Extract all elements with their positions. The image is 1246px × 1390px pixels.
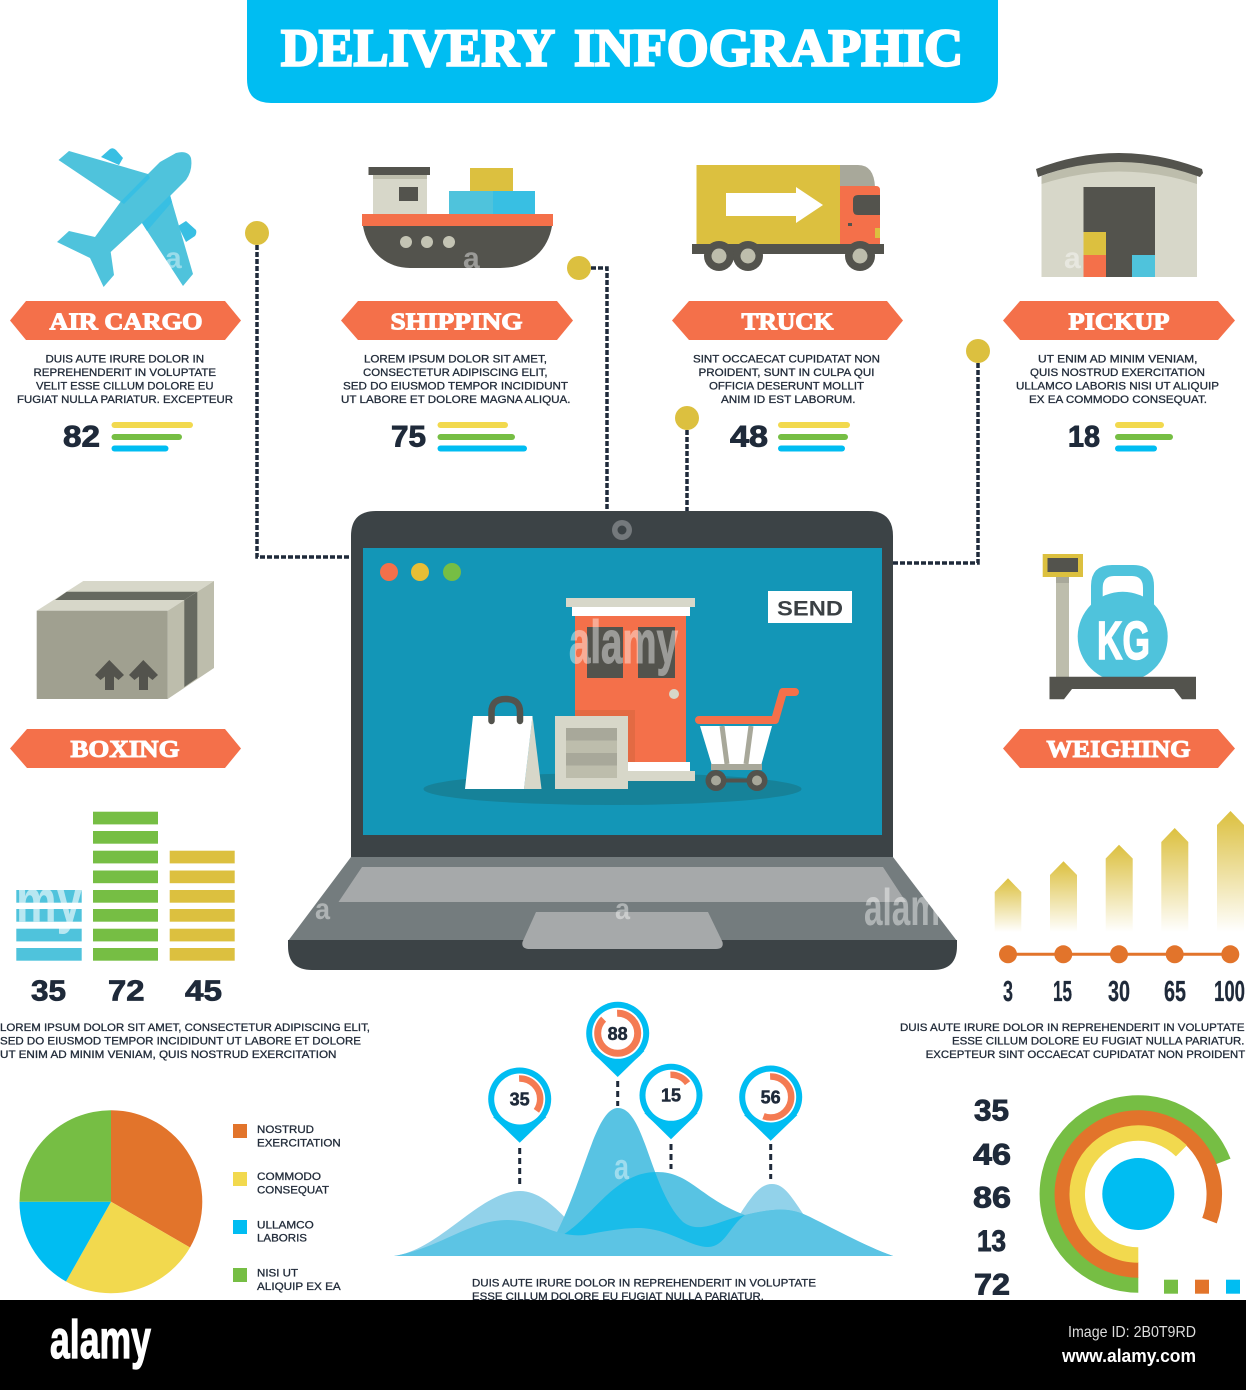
icon: warehouse: a: [1064, 242, 1081, 275]
label: shipping: SHIPPING: [390, 308, 522, 336]
icon: airplane: a: [165, 242, 182, 275]
watermark: center: alamy: [569, 609, 678, 676]
label: truck: [672, 301, 903, 340]
label: truck: TRUCK: [742, 308, 834, 336]
label: weighing: WEIGHING: [1046, 736, 1190, 763]
timeline values: 65: [1164, 976, 1186, 1008]
pie legend: ULLAMCO: [257, 1219, 314, 1231]
text: pickup description: QUIS NOSTRUD EXERCITATION: [1030, 367, 1205, 379]
timeline values: 3: [1003, 976, 1013, 1008]
send button: SEND: [777, 596, 843, 620]
shopping cart: [699, 692, 795, 791]
keyboard: [338, 867, 906, 902]
stat: shipping 75: 75: [391, 420, 426, 454]
text: pickup description: [1016, 354, 1219, 406]
text: air cargo description: FUGIAT NULLA PARIATUR. EXCEPTEUR: [17, 394, 233, 406]
icon: warehouse: [1036, 153, 1203, 277]
text: pickup description: EX EA COMMODO CONSEQUAT.: [1029, 394, 1207, 406]
bar values: 72: [108, 976, 144, 1008]
bar values: 45: [185, 976, 222, 1008]
map pin: 35: 35: [510, 1090, 530, 1110]
stat: pickup 18: [1068, 420, 1173, 454]
text: left paragraph: [0, 1022, 370, 1061]
bar values: [31, 976, 222, 1008]
text: right paragraph: DUIS AUTE IRURE DOLOR IN REPREHENDERIT IN VOLUPTATE: [900, 1022, 1244, 1034]
connector: air cargo to laptop: [245, 221, 352, 557]
pie chart: [19, 1110, 202, 1293]
text: chart caption: DUIS AUTE IRURE DOLOR IN REPREHENDERIT IN VOLUPTATE: [472, 1278, 816, 1290]
stat: truck 48: [730, 420, 850, 454]
footer image id: Image ID: 2B0T9RD: [1068, 1324, 1196, 1341]
label: air cargo: AIR CARGO: [50, 308, 202, 336]
text: right paragraph: EXCEPTEUR SINT OCCAECAT CUPIDATAT NON PROIDENT: [926, 1049, 1245, 1061]
package crate: [555, 716, 628, 789]
timeline values: 30: [1108, 976, 1130, 1008]
text: truck description: ANIM ID EST LABORUM.: [721, 394, 856, 406]
connector: truck to laptop: [675, 406, 699, 511]
webcam: [612, 520, 632, 540]
stat: pickup 18: 18: [1068, 420, 1100, 454]
connector: pickup to laptop: [893, 339, 990, 563]
title banner: [247, 0, 998, 103]
text: truck description: SINT OCCAECAT CUPIDATAT NON: [693, 354, 880, 366]
title banner: DELIVERY: [281, 20, 555, 78]
bar chart: stacked blocks: [16, 812, 235, 1008]
text: shipping description: CONSECTETUR ADIPISCING ELIT,: [363, 367, 548, 379]
pie legend: LABORIS: [257, 1233, 307, 1245]
pie legend: [233, 1124, 341, 1293]
text: pickup description: UT ENIM AD MINIM VENIAM,: [1038, 354, 1198, 366]
map pin: 15: [640, 1064, 702, 1139]
watermark: base: a: [315, 893, 330, 926]
area chart: a: [614, 1146, 630, 1187]
radial value list: 46: [973, 1138, 1011, 1171]
text: shipping description: UT LABORE ET DOLORE MAGNA ALIQUA.: [341, 394, 570, 406]
label: pickup: PICKUP: [1068, 308, 1170, 336]
door: [566, 598, 695, 781]
timeline: [999, 945, 1239, 963]
icon: cargo ship: [362, 167, 553, 275]
radial chart: [1047, 1103, 1223, 1285]
radial value list: 13: [977, 1225, 1006, 1258]
radial legend squares: [1164, 1280, 1240, 1294]
text: shipping description: LOREM IPSUM DOLOR SIT AMET,: [364, 354, 547, 366]
text: chart caption: ESSE CILLUM DOLORE EU FUGIAT NULLA PARIATUR.: [472, 1291, 764, 1303]
label: pickup: [1003, 301, 1235, 340]
map pin: 88: [586, 1002, 649, 1077]
map pin: 56: [739, 1066, 802, 1141]
pie legend: COMMODO: [257, 1171, 321, 1183]
text: left paragraph: LOREM IPSUM DOLOR SIT AMET, CONSECTETUR ADIPISCING ELIT,: [0, 1022, 370, 1034]
radial value list: [973, 1095, 1011, 1301]
map pin: 35: [488, 1068, 551, 1143]
icon: airplane: [57, 148, 196, 287]
text: air cargo description: REPREHENDERIT IN VOLUPTATE: [34, 367, 216, 379]
laptop: [288, 511, 957, 970]
laptop lid: [351, 511, 893, 858]
text: chart caption: [472, 1278, 816, 1303]
text: left paragraph: SED DO EIUSMOD TEMPOR INCIDIDUNT UT LABORE ET DOLORE: [0, 1035, 361, 1047]
area chart: [394, 1108, 893, 1256]
watermark on bar: my: [16, 868, 82, 935]
pie legend: CONSEQUAT: [257, 1184, 329, 1196]
map pin: 15: 15: [661, 1086, 681, 1106]
icon: kettlebell scale: KG: [1097, 611, 1150, 671]
bar: 72: [93, 812, 158, 961]
bar: 35: [16, 890, 82, 961]
touchpad: [522, 912, 723, 949]
label: air cargo: [10, 301, 241, 340]
laptop front edge: [288, 940, 957, 970]
connector: shipping to laptop: [567, 256, 607, 511]
bar values: 35: [31, 976, 66, 1008]
watermark: base: alam: [864, 879, 940, 937]
stat: shipping 75: [391, 420, 527, 454]
label: boxing: [10, 729, 241, 768]
text: shipping description: SED DO EIUSMOD TEMPOR INCIDIDUNT: [343, 381, 568, 393]
text: air cargo description: DUIS AUTE IRURE DOLOR IN: [46, 354, 204, 366]
timeline values: 15: [1053, 976, 1072, 1008]
window dots: [380, 563, 461, 581]
text: right paragraph: ESSE CILLUM DOLORE EU FUGIAT NULLA PARIATUR.: [952, 1035, 1244, 1047]
stat: truck 48: 48: [730, 420, 768, 454]
text: right paragraph: [900, 1022, 1245, 1061]
text: shipping description: [341, 354, 570, 406]
pie legend: NISI UT: [257, 1268, 298, 1280]
text: air cargo description: VELIT ESSE CILLUM DOLORE EU: [36, 381, 214, 393]
text: air cargo description: [17, 354, 233, 406]
stat: air cargo 82: [63, 420, 193, 454]
text: left paragraph: UT ENIM AD MINIM VENIAM, QUIS NOSTRUD EXERCITATION: [0, 1049, 337, 1061]
label: boxing: BOXING: [70, 736, 180, 763]
timeline values: [1003, 976, 1245, 1008]
icon: cardboard box: [37, 581, 214, 699]
icon: truck: [692, 165, 884, 271]
title banner: INFOGRAPHIC: [574, 20, 963, 78]
footer url: www.alamy.com: [1061, 1346, 1196, 1366]
text: truck description: OFFICIA DESERUNT MOLLIT: [709, 381, 864, 393]
watermark: base: [315, 879, 940, 937]
label: shipping: [341, 301, 573, 340]
pie legend: NOSTRUD: [257, 1124, 314, 1136]
icon: kettlebell scale: [1043, 554, 1196, 699]
footer strip: [0, 1300, 1246, 1390]
send button: [768, 591, 852, 623]
label: weighing: [1003, 729, 1235, 768]
watermark: base: a: [615, 893, 630, 926]
radial value list: 72: [974, 1268, 1010, 1301]
map pin: 88: 88: [608, 1024, 628, 1044]
footer logo: alamy: [50, 1310, 151, 1370]
ground shadow: [424, 773, 802, 805]
chart: rising arrows timeline: [995, 811, 1245, 1008]
shopping bag: [465, 699, 542, 789]
text: truck description: PROIDENT, SUNT IN CULPA QUI: [698, 367, 874, 379]
pie legend: EXERCITATION: [257, 1137, 341, 1149]
radial value list: 35: [974, 1095, 1009, 1128]
pie legend: ALIQUIP EX EA: [257, 1281, 341, 1293]
text: truck description: [693, 354, 880, 406]
laptop screen: [363, 548, 882, 835]
map pin: 56: 56: [761, 1088, 781, 1108]
bar: 45: [170, 851, 235, 961]
arrows: [995, 811, 1244, 932]
pin stems: [520, 1081, 771, 1188]
text: pickup description: ULLAMCO LABORIS NISI UT ALIQUIP: [1016, 381, 1219, 393]
icon: cargo ship: a: [463, 242, 480, 275]
stat: air cargo 82: 82: [63, 420, 100, 454]
laptop base: [288, 857, 957, 941]
radial value list: 86: [973, 1181, 1011, 1214]
